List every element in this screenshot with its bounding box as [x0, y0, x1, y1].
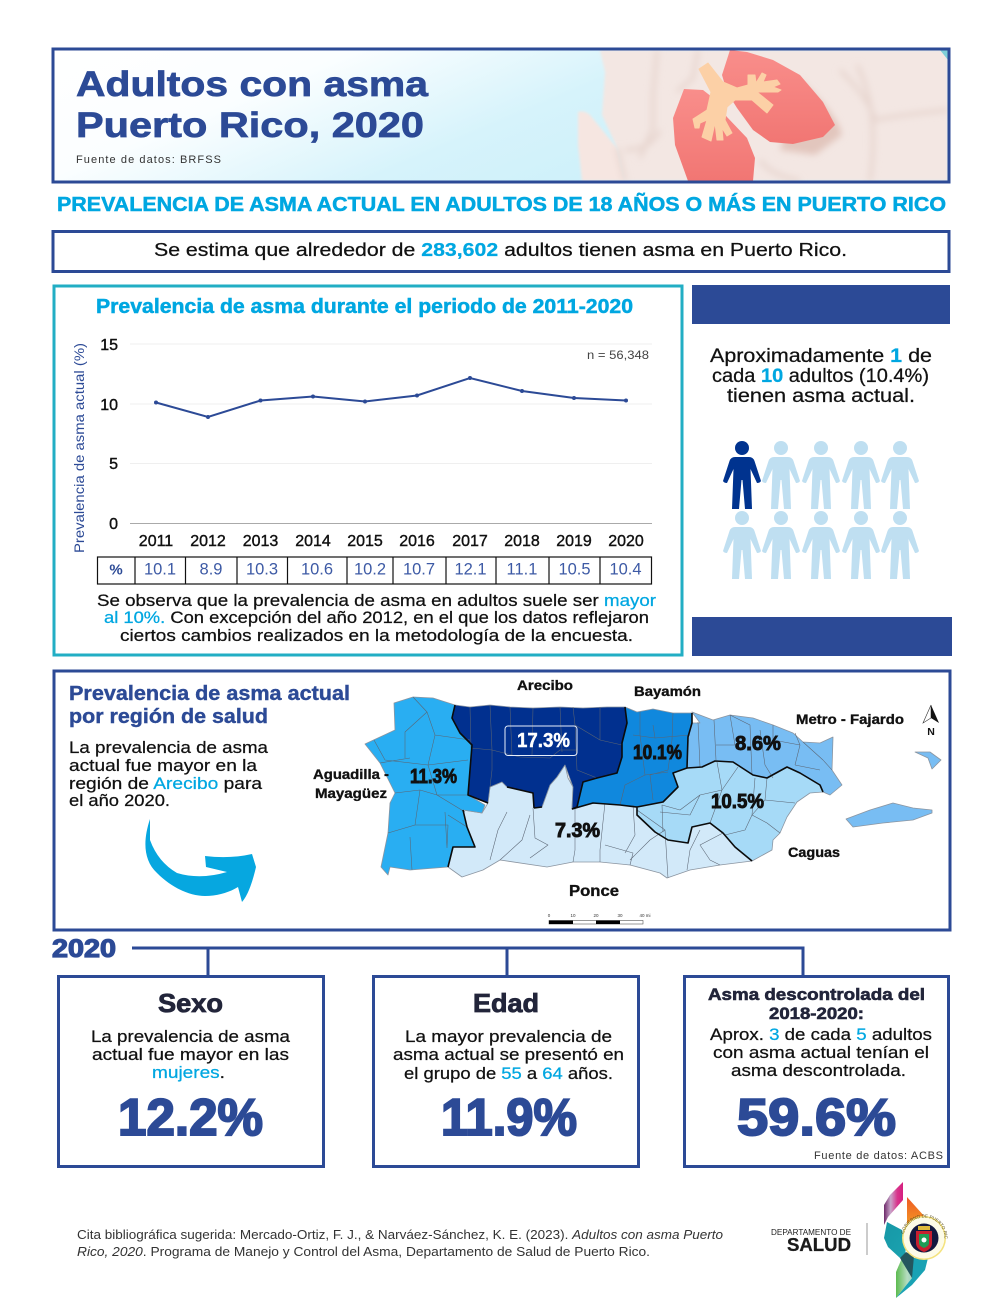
region boundaries [448, 705, 823, 867]
header banner [53, 49, 949, 182]
card: asma descontrolada: Asma descontrolada del [708, 985, 925, 1004]
line chart: 2019 [556, 533, 592, 550]
title: Adultos con asma [76, 65, 429, 104]
line chart: 2014 [295, 533, 331, 550]
region: Metro-Fajardo [687, 712, 842, 795]
chart note: al 10%. Con excepción del año 2012, en el que los datos reflejaron [104, 609, 649, 627]
card: asma descontrolada: 59.6% [737, 1089, 896, 1147]
data table: 10.1 [144, 560, 176, 578]
line chart [72, 337, 652, 553]
year heading: 2020 [52, 935, 116, 963]
region: Arecibo [452, 705, 627, 809]
card: sexo: mujeres . [152, 1063, 225, 1082]
region percentages: 17.3% [517, 730, 570, 752]
region percentages: 8.6% [735, 733, 781, 755]
chart note [97, 592, 657, 645]
card: sexo [58, 976, 324, 1166]
panel: trend chart [54, 286, 682, 655]
statement: tienen asma actual. [727, 386, 915, 407]
region labels: Arecibo [517, 677, 573, 693]
map description: actual fue mayor en la [69, 756, 258, 775]
line chart: 2015 [347, 533, 383, 550]
card: sexo: Sexo [158, 988, 223, 1018]
data table: 12.1 [454, 560, 487, 578]
estimate callout [53, 232, 949, 272]
data table: % [109, 562, 123, 578]
chart note: ciertos cambios realizados en la metodología de la encuesta. [120, 627, 633, 645]
scale bar: 30 [617, 913, 623, 918]
chart note: Se observa que la prevalencia de asma en adultos suele ser mayor [97, 592, 657, 610]
logo: Departamento de Salud: SALUD [787, 1235, 851, 1255]
citation: Rico, 2020 . Programa de Manejo y Control del Asma, Departamento de Salud de Puerto Rico. [77, 1244, 650, 1259]
panel: 1 in 10 adults [692, 285, 952, 656]
line chart: 15 [100, 337, 118, 354]
icon: north arrow [923, 705, 939, 738]
line chart: 0 [109, 516, 118, 533]
card: edad: Edad [473, 988, 539, 1018]
scale bar: 20 [593, 913, 599, 918]
region: Bayamón [572, 707, 692, 809]
scale bar: 10 [570, 913, 576, 918]
connector lines [132, 948, 803, 975]
section heading: PREVALENCIA DE ASMA ACTUAL EN ADULTOS DE 18 AÑOS O MÁS EN PUERTO RICO [57, 193, 946, 216]
data table: 10.6 [301, 560, 333, 578]
region labels [313, 677, 904, 900]
line chart: n = 56,348 [587, 348, 649, 362]
region: Caguas [637, 761, 823, 861]
icon: people pictogram [723, 441, 919, 579]
region labels: Metro - Fajardo [796, 711, 904, 727]
municipal lines [374, 697, 832, 878]
card: edad: La mayor prevalencia de [405, 1027, 612, 1046]
card: edad [374, 976, 638, 1166]
data table: 10.5 [558, 560, 591, 578]
region labels: Ponce [569, 883, 619, 900]
map description: región de Arecibo para [69, 774, 263, 793]
region percentages: 7.3% [555, 820, 600, 842]
card: sexo: 12.2% [118, 1089, 263, 1147]
line chart: 2020 [608, 533, 644, 550]
line chart: 5 [109, 456, 118, 473]
card: edad: el grupo de 55 a 64 años. [404, 1064, 613, 1083]
region percentages: 11.3% [410, 766, 457, 788]
statement [710, 346, 932, 407]
card: asma descontrolada: con asma actual tenían el [713, 1043, 929, 1062]
card: sexo: La prevalencia de asma [91, 1027, 291, 1046]
card: asma descontrolada: 2018-2020: [769, 1004, 864, 1023]
card: edad: asma actual se presentó en [393, 1045, 624, 1064]
title: Puerto Rico, 2020 [76, 106, 424, 145]
arrow [145, 819, 256, 902]
region labels: Caguas [788, 844, 840, 860]
line chart: Prevalencia de asma actual (%) [72, 343, 87, 553]
icon: government seal: GOBIERNO DE PUERTO RICO [901, 1214, 948, 1239]
statement: cada 10 adultos (10.4%) [712, 366, 929, 387]
data table: 11.1 [507, 560, 537, 578]
card: asma descontrolada: asma descontrolada. [731, 1061, 906, 1080]
line chart: 2016 [399, 533, 435, 550]
region percentages [410, 726, 781, 842]
bottom bar [692, 617, 952, 656]
map heading [69, 683, 350, 728]
statement: Aproximadamente 1 de [710, 346, 932, 367]
card: asma descontrolada [684, 976, 948, 1166]
map heading: por región de salud [69, 706, 268, 728]
region: Ponce [448, 765, 752, 878]
panel: regional map [54, 671, 950, 930]
card: asma descontrolada: Aprox. 3 de cada 5 adultos [710, 1025, 932, 1044]
region: Aguadilla-Mayagüez [365, 697, 485, 875]
citation [77, 1227, 723, 1259]
top bar [692, 285, 950, 324]
logo: Departamento de Salud: DEPARTAMENTO DE [771, 1228, 851, 1237]
data table: 10.3 [246, 560, 278, 578]
card: edad: 11.9% [441, 1089, 577, 1147]
region labels: Mayagüez [315, 785, 387, 801]
map of Puerto Rico [365, 697, 941, 878]
islands [846, 752, 941, 827]
icon: north arrow: N [927, 726, 935, 738]
card: asma descontrolada: Fuente de datos: ACBS [814, 1150, 943, 1162]
scale bar [548, 913, 651, 924]
line chart: 2017 [452, 533, 488, 550]
scale bar: 0 [548, 913, 551, 918]
photo: hands holding paper lungs [578, 50, 948, 181]
line chart: 2013 [243, 533, 278, 550]
citation: Cita bibliográfica sugerida: Mercado-Ortiz, F. J., & Narváez-Sánchez, K. E. (2023). Adultos con asma Puerto [77, 1227, 723, 1242]
estimate callout: Se estima que alrededor de 283,602 adultos tienen asma en Puerto Rico. [154, 239, 847, 260]
data table: 10.7 [403, 560, 435, 578]
title [76, 65, 429, 145]
line chart: 2011 [139, 533, 173, 550]
data source: Fuente de datos: BRFSS [76, 154, 221, 166]
line chart: 10 [100, 397, 118, 414]
data table [98, 557, 652, 584]
region labels: Aguadilla - [313, 766, 389, 782]
card: sexo: actual fue mayor en las [92, 1045, 289, 1064]
scale bar: 40 mi [639, 913, 651, 918]
line chart: 2018 [504, 533, 540, 550]
map description: el año 2020. [69, 791, 170, 810]
chart title: Prevalencia de asma durante el periodo de 2011-2020 [96, 296, 633, 318]
data table: 10.2 [354, 560, 386, 578]
region percentages: 10.5% [711, 791, 764, 813]
data table: 8.9 [200, 560, 222, 578]
line chart: 2012 [190, 533, 226, 550]
map description [69, 738, 269, 810]
data table: 10.4 [609, 560, 642, 578]
region labels: Bayamón [634, 683, 701, 699]
map heading: Prevalencia de asma actual [69, 683, 350, 705]
region percentages: 10.1% [633, 742, 682, 764]
map description: La prevalencia de asma [69, 738, 269, 757]
